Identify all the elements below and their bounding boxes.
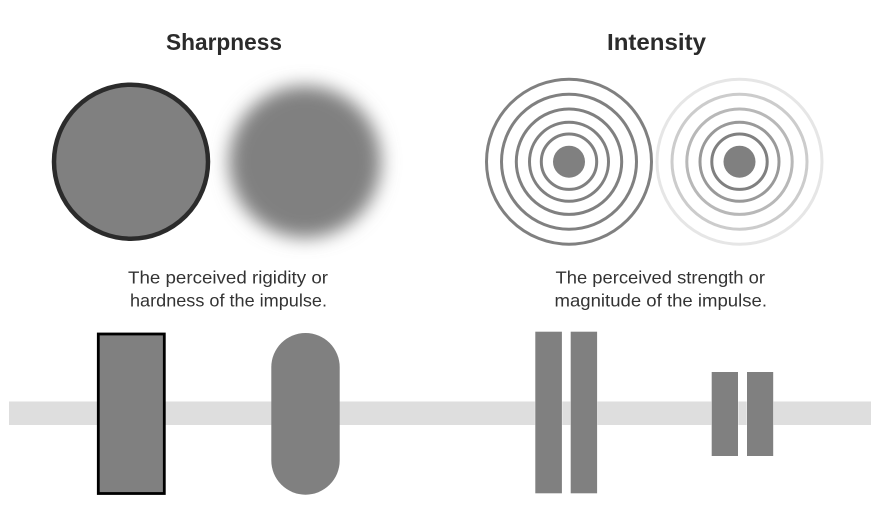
icon: strong concentric rings [486, 79, 652, 244]
icon: fading concentric rings [657, 79, 822, 244]
text: sharpness description: hardness of the impulse. [130, 291, 327, 311]
text: intensity description: magnitude of the impulse. [554, 291, 767, 311]
impulse: soft rounded pill [271, 333, 340, 495]
text: intensity description [554, 268, 767, 311]
text: intensity description: The perceived strength or [556, 268, 765, 288]
impulse: sharp rectangle [98, 334, 164, 494]
impulse: tall double bars [535, 332, 597, 493]
text: sharpness description [128, 268, 328, 311]
baseline band [9, 402, 871, 425]
impulse: short double bars [712, 372, 773, 456]
icon: blurred circle [229, 86, 381, 238]
heading: Sharpness: Sharpness [166, 29, 282, 55]
heading: Intensity: Intensity [607, 29, 706, 55]
icon: sharp circle [54, 85, 208, 239]
text: sharpness description: The perceived rigidity or [128, 268, 328, 288]
